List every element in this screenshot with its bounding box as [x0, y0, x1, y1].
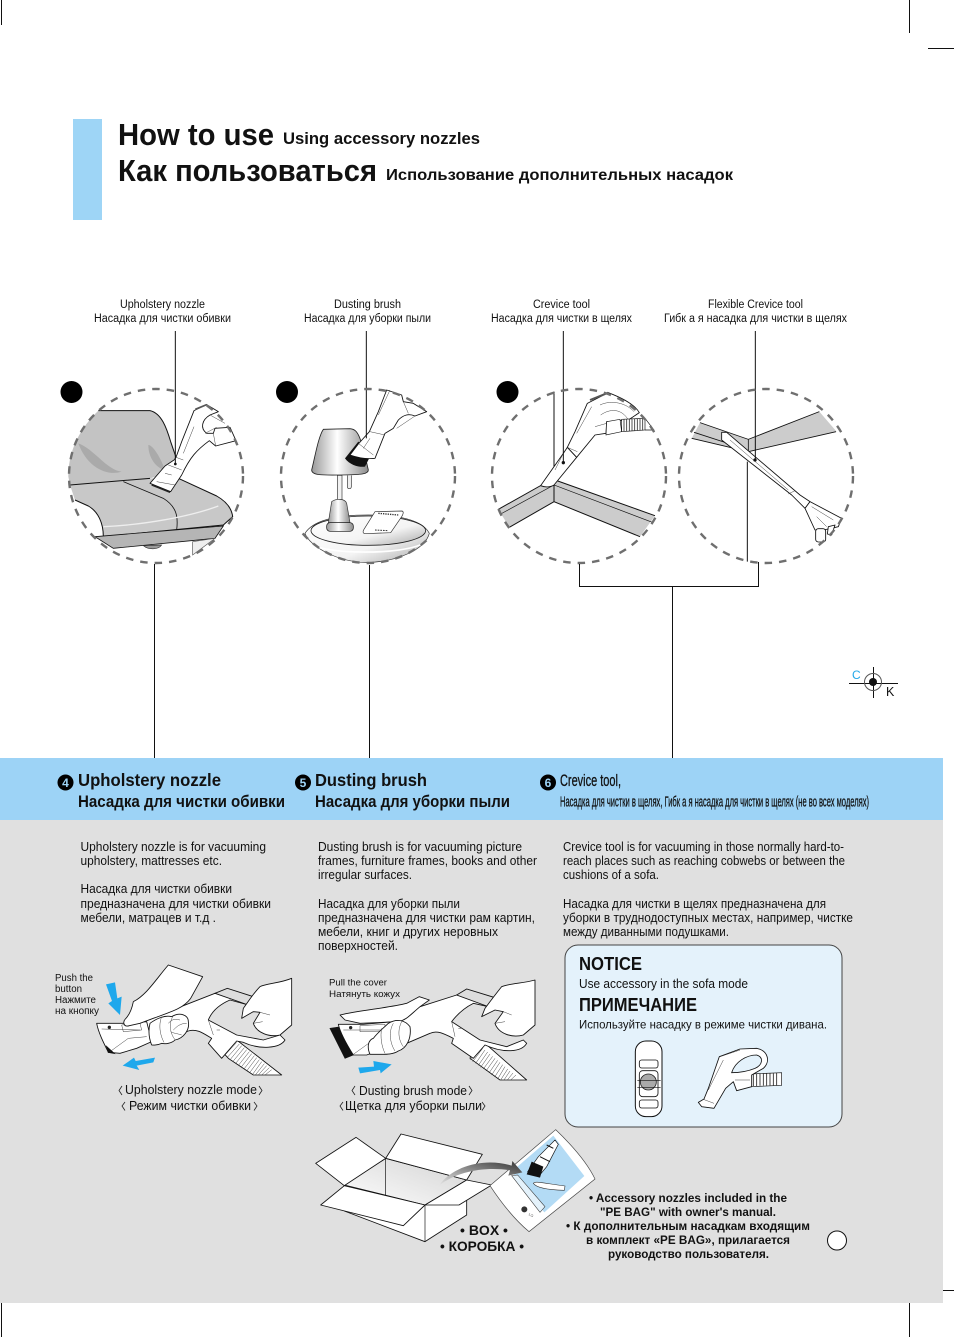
- nozzle labels: Гибк а я насадка для чистки в щелях: [664, 313, 847, 325]
- grey content panel: [0, 820, 943, 1303]
- nozzle labels: Насадка для уборки пыли: [304, 313, 431, 325]
- illustration: upholstery nozzle mode: [97, 965, 292, 1075]
- icon: sofa mode switch: [635, 1041, 662, 1117]
- text block: upholstery nozzle: мебели, матрацев и т.д .: [80, 911, 216, 925]
- illustration: flexible crevice tool in corner: [692, 331, 842, 562]
- illustration: dusting brush mode: [330, 980, 535, 1080]
- leader lines: [747, 331, 755, 562]
- text block: crevice tool: cushions of a sofa.: [563, 868, 659, 882]
- panel: notice: [565, 945, 842, 1127]
- nozzle labels: [94, 299, 847, 325]
- nozzle labels: Насадка для чистки в щелях: [491, 313, 632, 325]
- arrow: box to bag: [439, 1161, 522, 1186]
- text block: crevice tool: [563, 840, 853, 939]
- illustration: crevice tool in corner: [498, 331, 655, 537]
- text block: accessories in PE bag: в комплект «PE BAG», прилагается: [586, 1235, 790, 1247]
- icon: hand vacuum handle: [698, 1048, 782, 1108]
- text block: dusting brush: предназначена для чистки рам картин,: [318, 911, 535, 925]
- text block: dusting brush: мебели, книг и других неровных: [318, 925, 499, 939]
- registration mark: K: [886, 685, 895, 699]
- blue header band: [0, 758, 943, 820]
- blue arrows: [106, 982, 122, 1015]
- title: Использование дополнительных насадок: [386, 167, 734, 184]
- text block: dusting brush: frames, furniture frames, books and other: [318, 854, 537, 868]
- panel heading: dusting brush: [295, 770, 510, 811]
- callout: push the button: на кнопку: [55, 1006, 99, 1017]
- title: [118, 117, 734, 188]
- caption: upholstery nozzle mode: [119, 1083, 262, 1113]
- nozzle labels: Насадка для чистки обивки: [94, 313, 231, 325]
- panel heading: upholstery nozzle: [58, 770, 285, 811]
- text block: upholstery nozzle: Насадка для чистки обивки: [80, 882, 232, 896]
- callout: push the button: [55, 973, 99, 1017]
- blue arrow: [358, 1061, 392, 1073]
- panel heading: dusting brush: Насадка для уборки пыли: [315, 792, 510, 811]
- text block: dusting brush: [318, 840, 537, 953]
- leader line: [562, 331, 565, 463]
- text block: crevice tool: Насадка для чистки в щелях предназначена для: [563, 897, 826, 911]
- callout: push the button: Push the: [55, 973, 93, 984]
- text block: upholstery nozzle: Upholstery nozzle is for vacuuming: [80, 840, 266, 854]
- connector lines to panels: [154, 562, 758, 758]
- panel heading: dusting brush: 5: [300, 776, 307, 790]
- panel heading: crevice tool: 6: [545, 776, 552, 790]
- callout: pull the cover: Натянуть кожух: [329, 989, 400, 1000]
- text block: crevice tool: Crevice tool is for vacuuming in those normally hard-to-: [563, 840, 844, 854]
- notice text: Use accessory in the sofa mode: [579, 977, 748, 991]
- illustration: dusting brush on lamp: [305, 331, 429, 563]
- text block: dusting brush: поверхностей.: [318, 939, 398, 953]
- text block: upholstery nozzle: [80, 840, 271, 925]
- heading: notice: NOTICE: [579, 954, 642, 974]
- text block: crevice tool: reach places such as reaching cobwebs or between the: [563, 854, 845, 868]
- caption: upholstery nozzle mode: Upholstery nozzle mode: [125, 1083, 257, 1097]
- panel heading: crevice tool: Crevice tool,: [560, 772, 621, 790]
- callout: pull the cover: Pull the cover: [329, 978, 387, 988]
- text block: dusting brush: irregular surfaces.: [318, 868, 412, 882]
- illustration: upholstery nozzle on sofa: [68, 331, 236, 555]
- leader line: [174, 331, 177, 463]
- title: Using accessory nozzles: [283, 129, 480, 148]
- text block: accessories in PE bag: [566, 1193, 810, 1261]
- callout: push the button: Нажмите: [55, 995, 96, 1006]
- text block: dusting brush: Dusting brush is for vacuuming picture: [318, 840, 522, 854]
- callout: push the button: button: [55, 984, 82, 995]
- notice text russian: Используйте насадку в режиме чистки дивана.: [579, 1018, 827, 1032]
- text block: accessories in PE bag: руководство пользователя.: [608, 1249, 769, 1261]
- title: Как пользоваться: [118, 153, 377, 188]
- title colour block: [73, 119, 102, 220]
- caption: box: • BOX •: [460, 1222, 508, 1238]
- panel heading: upholstery nozzle: Upholstery nozzle: [78, 770, 221, 790]
- callout: pull the cover: [329, 978, 400, 1000]
- caption: dusting brush mode: [340, 1084, 485, 1113]
- text block: accessories in PE bag: • Accessory nozzles included in the: [589, 1193, 787, 1205]
- text block: upholstery nozzle: upholstery, mattresses etc.: [80, 854, 222, 868]
- illustration: open box: [316, 1134, 492, 1242]
- illustration: PE bag: LG: [528, 1212, 534, 1218]
- text block: dusting brush: Насадка для уборки пыли: [318, 897, 460, 911]
- caption: box: [440, 1222, 524, 1254]
- nozzle labels: Upholstery nozzle: [120, 299, 205, 311]
- text block: crevice tool: уборки в труднодоступных местах, например, чистке: [563, 911, 853, 925]
- dashed detail circles: [69, 389, 853, 563]
- text block: accessories in PE bag: • К дополнительным насадкам входящим: [566, 1221, 810, 1233]
- panel heading: crevice tool: [540, 772, 869, 810]
- illustration: PE bag: [490, 1130, 595, 1232]
- caption: dusting brush mode: Dusting brush mode: [359, 1084, 467, 1098]
- nozzle labels: Flexible Crevice tool: [708, 299, 803, 311]
- text block: crevice tool: между диванными подушками.: [563, 925, 729, 939]
- panel heading: upholstery nozzle: 4: [62, 776, 69, 790]
- nozzle labels: Dusting brush: [334, 299, 401, 311]
- text block: accessories in PE bag: "PE BAG" with owner's manual.: [600, 1207, 776, 1219]
- page number circle: [828, 1231, 846, 1250]
- panel heading: upholstery nozzle: Насадка для чистки обивки: [78, 792, 285, 811]
- step dots: [60, 381, 518, 403]
- heading: notice russian: ПРИМЕЧАНИЕ: [579, 995, 697, 1015]
- caption: upholstery nozzle mode: Режим чистки обивки: [129, 1099, 251, 1113]
- leader line: [365, 331, 368, 438]
- nozzle labels: Crevice tool: [533, 299, 590, 311]
- registration mark: C: [852, 668, 861, 682]
- text block: upholstery nozzle: предназначена для чистки обивки: [80, 897, 271, 911]
- title: How to use: [118, 117, 274, 152]
- caption: dusting brush mode: Щетка для уборки пыли: [345, 1099, 482, 1113]
- registration mark: [849, 667, 898, 699]
- caption: box: • КОРОБКА •: [440, 1238, 524, 1254]
- panel heading: dusting brush: Dusting brush: [315, 770, 427, 790]
